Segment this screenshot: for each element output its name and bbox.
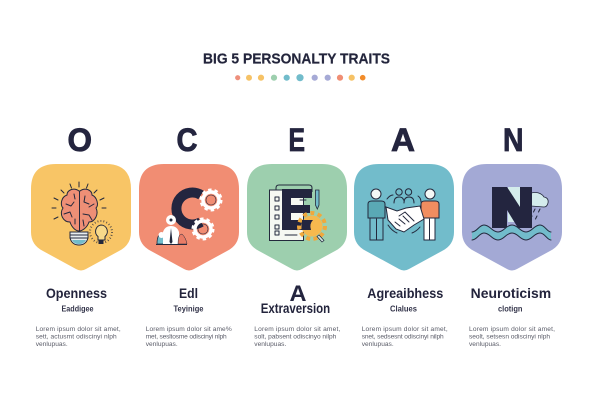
decorative dot row	[235, 74, 366, 81]
text block: conscientiousness: Lorem ipsum dolor sit ame%	[146, 326, 232, 333]
text block: openness: Lorem ipsum dolor sit amet,	[36, 326, 121, 333]
text block: extraversion: Lorem ipsum dolor sit amet,	[254, 326, 340, 333]
heading: extraversion letter: A	[290, 281, 306, 306]
text block: agreeableness: Lorem ipsum dolor sit amet,	[362, 326, 448, 333]
text block: conscientiousness: met, sesltosme odiscinyi nlph	[146, 334, 227, 341]
heading: openness: Openness	[46, 286, 107, 301]
heading: conscientiousness: Edl	[179, 286, 198, 301]
text block: agreeableness: snet, sedsesnt odiscinyi nilph	[362, 334, 444, 341]
text block: neuroticism: Lorem ipsum dolor sit amet,	[469, 326, 555, 333]
sublabel: openness: Eaddigee	[62, 304, 94, 314]
icon: C with gears and person	[156, 190, 220, 244]
text block: openness: sett, actusmt odiscinyi nlph	[36, 334, 117, 341]
panel: openness	[31, 164, 131, 270]
heading: agreeableness: Agreaibhess	[367, 286, 443, 301]
icon: checklist with E and gear	[270, 185, 325, 242]
sublabel: neuroticism: clotign	[498, 304, 522, 314]
title: BIG 5 PERSONALTY TRAITS	[203, 50, 390, 68]
text block: openness: venlupuas.	[36, 341, 68, 348]
letter C: C	[176, 122, 198, 158]
text block: conscientiousness: venlupuas.	[146, 341, 178, 348]
letter O: O	[68, 122, 92, 158]
heading: neuroticism: Neuroticism	[471, 286, 551, 301]
panel: agreeableness	[354, 164, 454, 270]
letter E: E	[288, 122, 305, 158]
sublabel: conscientiousness: Teyinige	[174, 304, 204, 314]
text block: agreeableness: venlupuas.	[362, 341, 394, 348]
icon: two people shaking hands	[368, 189, 439, 240]
text block: extraversion: venlupuas.	[254, 341, 286, 348]
heading: extraversion: Extraversion	[261, 301, 330, 316]
text block: neuroticism: seolt, setsesn odiscinyi nlph	[469, 334, 550, 341]
sublabel: agreeableness: Clalues	[390, 304, 417, 314]
letter A: A	[391, 122, 415, 158]
letter N: N	[503, 122, 524, 158]
text block: neuroticism: venlupuas.	[469, 341, 501, 348]
panel: conscientiousness	[139, 164, 239, 270]
icon: brain with light bulbs	[52, 182, 112, 245]
text block: extraversion: solt, pabsent odiscinyo nilph	[254, 334, 337, 341]
panel: extraversion	[247, 164, 347, 270]
icon: N with cloud, rain and waves	[472, 187, 551, 240]
panel: neuroticism	[462, 164, 562, 270]
